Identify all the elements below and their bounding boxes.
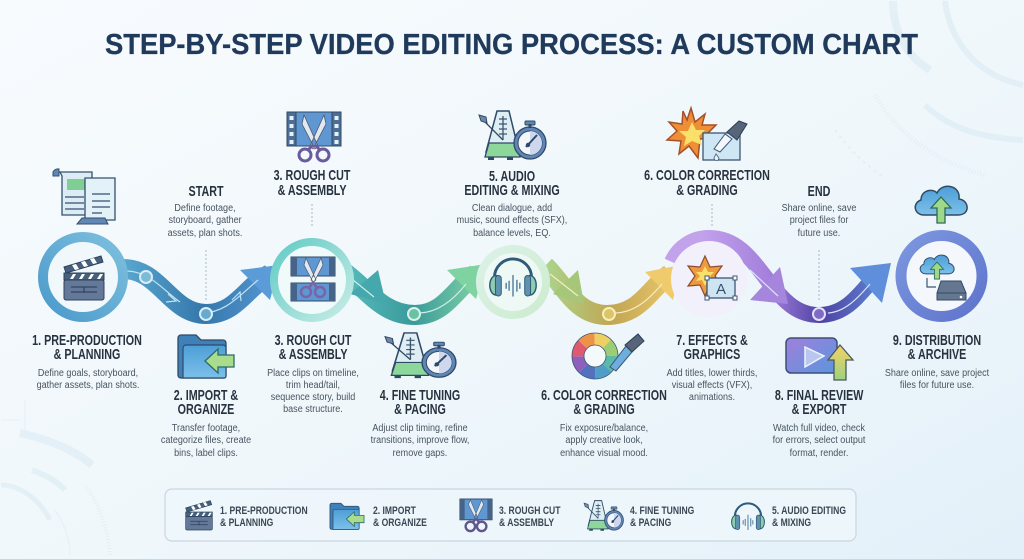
text: step 2 xyxy=(161,386,251,459)
circle: step 1 xyxy=(43,237,123,317)
text: step 8: format, render. xyxy=(790,447,848,459)
icon: cloud and drive xyxy=(920,255,966,300)
text: end xyxy=(782,182,856,239)
text: step 6: & GRADING xyxy=(573,400,635,417)
text: step 3 top: & ASSEMBLY xyxy=(278,181,347,198)
text: step 7: GRAPHICS xyxy=(684,345,740,362)
text: step 5 top xyxy=(457,167,567,239)
text: step 4: & PACING xyxy=(394,400,446,417)
title: STEP-BY-STEP VIDEO EDITING PROCESS: A CUSTOM CHART xyxy=(105,29,918,61)
text: step 8: Watch full video, check xyxy=(773,422,865,434)
icon: film with scissors xyxy=(291,257,335,301)
icon: folder with arrow xyxy=(178,335,234,378)
icon: explosion and dropper xyxy=(667,108,747,160)
text: step 6: apply creative look, xyxy=(565,434,643,446)
text: step 2: categorize files, create xyxy=(161,434,251,446)
text: end: END xyxy=(808,182,830,199)
text: end: Share online, save xyxy=(782,202,856,214)
text: step 7: 7. EFFECTS & xyxy=(676,331,748,348)
text: step 6 top xyxy=(644,166,770,198)
text: step 8 xyxy=(773,386,866,459)
text: step 5 top: EDITING & MIXING xyxy=(464,181,560,198)
text: step 6 top: & GRADING xyxy=(676,181,738,198)
text: start: Define footage, xyxy=(174,202,236,214)
text: step 6 top: 6. COLOR CORRECTION xyxy=(644,166,770,183)
arrow: effects to distribution xyxy=(672,238,891,320)
icon: effects and text frame: A xyxy=(716,281,726,298)
text: step 8: 8. FINAL REVIEW xyxy=(775,386,864,403)
text: step 6: Fix exposure/balance, xyxy=(560,422,648,434)
text: step 2: ORGANIZE xyxy=(178,400,234,417)
legend item 4: 4. FINE TUNING xyxy=(630,505,695,517)
text: step 3: & ASSEMBLY xyxy=(279,345,348,362)
text: step 8: for errors, select output xyxy=(773,434,866,446)
text: step 9: 9. DISTRIBUTION xyxy=(893,331,981,348)
circle: step 7 xyxy=(671,241,747,317)
legend item 3 xyxy=(460,499,560,531)
text: step 8: & EXPORT xyxy=(792,400,847,417)
text: step 9: files for future use. xyxy=(900,379,974,391)
legend item 2: & ORGANIZE xyxy=(373,517,427,529)
text: start: storyboard, gather xyxy=(168,214,242,226)
text: step 7: Add titles, lower thirds, xyxy=(667,367,757,379)
text: start: START xyxy=(189,182,224,199)
connector: dotted lines xyxy=(206,204,819,300)
text: step 4: transitions, improve flow, xyxy=(371,434,469,446)
panel: legend xyxy=(165,489,856,541)
text: step 3: Place clips on timeline, xyxy=(267,367,359,379)
text: step 3: trim head/tail, xyxy=(286,379,340,391)
text: end: project files for xyxy=(790,214,849,226)
icon: clapperboard xyxy=(64,256,104,300)
text: step 1: Define goals, storyboard, xyxy=(38,367,138,379)
icon: cloud upload xyxy=(915,186,967,223)
text: step 5 top: Clean dialogue, add xyxy=(472,202,552,214)
text: step 4: remove gaps. xyxy=(393,447,447,459)
text: start xyxy=(168,182,242,239)
legend item 1 xyxy=(186,501,308,530)
text: step 6: enhance visual mood. xyxy=(560,447,648,459)
legend item 2 xyxy=(330,503,427,529)
arrow: audio to color correction xyxy=(545,265,681,320)
circle: step 5 xyxy=(480,249,546,315)
icon: color wheel and dropper xyxy=(572,333,644,379)
text: step 3 xyxy=(267,331,359,415)
legend item 1: & PLANNING xyxy=(220,517,274,529)
circle: step 3 xyxy=(274,242,350,318)
text: end: future use. xyxy=(798,227,840,239)
legend item 5 xyxy=(732,503,846,530)
legend item 2: 2. IMPORT xyxy=(373,505,416,517)
text: step 7 xyxy=(667,331,757,403)
text: step 6 xyxy=(541,386,667,459)
text: step 3 top xyxy=(274,166,351,198)
text: step 2: Transfer footage, xyxy=(172,422,240,434)
text: step 9 xyxy=(885,331,989,391)
legend item 4 xyxy=(584,501,695,531)
text: step 4: Adjust clip timing, refine xyxy=(372,422,468,434)
text: step 1 xyxy=(32,331,142,391)
text: step 1: & PLANNING xyxy=(54,345,120,362)
text: step 3: 3. ROUGH CUT xyxy=(275,331,352,348)
legend item 5: 5. AUDIO EDITING xyxy=(772,505,846,517)
text: step 9: & ARCHIVE xyxy=(908,345,966,362)
icon: metronome and stopwatch xyxy=(385,333,456,378)
legend item 5: & MIXING xyxy=(772,517,811,529)
text: step 2: 2. IMPORT & xyxy=(174,386,238,403)
arrow: rough cut to audio xyxy=(338,264,486,320)
text: step 3 top: 3. ROUGH CUT xyxy=(274,166,351,183)
icon: film and scissors xyxy=(287,112,341,161)
circle: step 9 xyxy=(901,236,982,316)
arrow: pre-production to rough cut xyxy=(122,265,279,320)
text: step 5 top: music, sound effects (SFX), xyxy=(457,214,567,226)
text: step 6: 6. COLOR CORRECTION xyxy=(541,386,667,403)
icon: script pages xyxy=(53,169,115,224)
text: step 7: visual effects (VFX), xyxy=(672,379,752,391)
legend item 4: & PACING xyxy=(630,517,672,529)
text: step 3: sequence story, build xyxy=(271,391,355,403)
icon: metronome and stopwatch xyxy=(479,111,546,160)
legend item 3: 3. ROUGH CUT xyxy=(499,505,560,517)
icon: video play with up arrow xyxy=(786,338,853,380)
text: step 5 top: balance levels, EQ. xyxy=(473,227,551,239)
text: step 4: 4. FINE TUNING xyxy=(380,386,460,403)
legend item 3: & ASSEMBLY xyxy=(499,517,554,529)
text: step 3: base structure. xyxy=(283,403,343,415)
text: step 1: gather assets, plan shots. xyxy=(37,379,139,391)
text: step 4 xyxy=(371,386,469,459)
text: step 1: 1. PRE-PRODUCTION xyxy=(32,331,142,348)
text: step 9: Share online, save project xyxy=(885,367,989,379)
icon: headphones xyxy=(490,259,536,296)
text: step 2: bins, label clips. xyxy=(174,447,238,459)
legend item 1: 1. PRE-PRODUCTION xyxy=(220,505,308,517)
text: step 5 top: 5. AUDIO xyxy=(489,167,535,184)
text: start: assets, plan shots. xyxy=(168,227,242,239)
text: step 7: animations. xyxy=(689,391,735,403)
